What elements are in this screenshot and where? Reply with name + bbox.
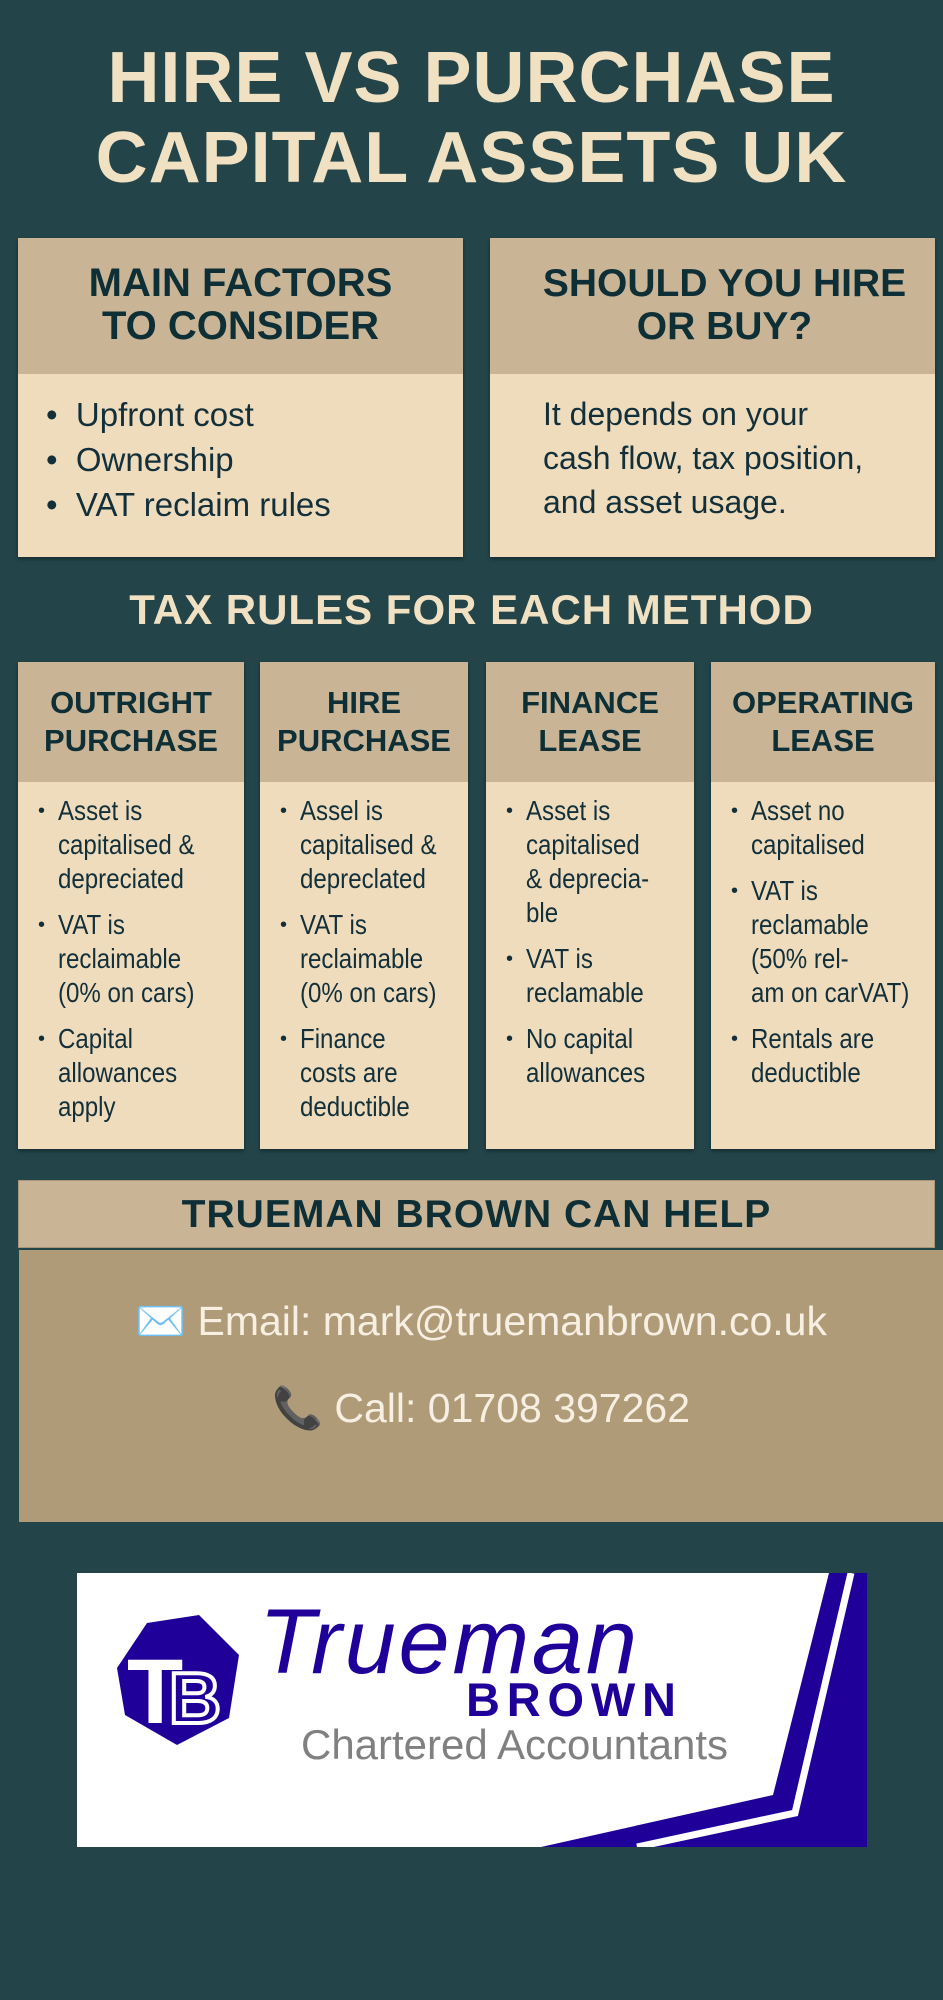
list: reclamable — [526, 977, 644, 1008]
list: factors: • Upfront cost — [46, 396, 254, 433]
list: allowances — [526, 1057, 645, 1088]
title: HIRE VS PURCHASE — [107, 38, 836, 118]
list: Capital — [58, 1023, 133, 1054]
heading: LEASE — [771, 723, 875, 758]
heading: PURCHASE — [44, 723, 218, 758]
title: CAPITAL ASSETS UK — [96, 118, 847, 198]
heading — [260, 662, 468, 782]
list: VAT is — [526, 943, 593, 974]
heading: LEASE — [538, 723, 642, 758]
list: reclaimable — [58, 943, 181, 974]
list: Asset is — [526, 795, 610, 826]
panel: hire or buy — [490, 238, 935, 557]
list: capitalised & — [300, 829, 437, 860]
heading: HIRE — [327, 685, 401, 720]
list: factors: • Ownership — [46, 441, 234, 478]
text: answer: cash flow, tax position, — [543, 440, 863, 476]
list — [38, 795, 195, 1122]
heading: main factors — [18, 238, 463, 374]
list: allowances — [58, 1057, 177, 1088]
list: VAT is — [58, 909, 125, 940]
list: VAT is — [751, 875, 818, 906]
list: & deprecia- — [526, 863, 649, 894]
heading: tax rules: TAX RULES FOR EACH METHOD — [129, 586, 814, 633]
logo text: BROWN — [466, 1673, 676, 1726]
heading: hire or buy: OR BUY? — [637, 305, 812, 348]
logo text: Chartered Accountants — [301, 1721, 728, 1768]
logo: trueman brown — [77, 1573, 867, 1847]
list: (50% rel- — [751, 943, 849, 974]
list: Rentals are — [751, 1023, 874, 1054]
heading — [18, 662, 244, 782]
heading: OPERATING — [732, 685, 914, 720]
heading — [711, 662, 935, 782]
panel: contact — [19, 1250, 943, 1522]
contact: phone: 📞 Call: 01708 397262 — [272, 1385, 690, 1431]
list: apply — [58, 1091, 116, 1122]
icon: TB hexagon — [117, 1615, 239, 1745]
list: (0% on cars) — [300, 977, 436, 1008]
list: Asset no — [751, 795, 845, 826]
icon: TB hexagon: B — [169, 1659, 221, 1739]
list: VAT is — [300, 909, 367, 940]
panel: main factors — [18, 238, 463, 557]
heading: main factors: TO CONSIDER — [102, 304, 379, 348]
list: capitalised & — [58, 829, 195, 860]
list: Finance — [300, 1023, 386, 1054]
heading: hire or buy: SHOULD YOU HIRE — [543, 262, 906, 305]
list: capitalised — [751, 829, 865, 860]
list — [506, 795, 649, 1088]
logo text: Trueman — [259, 1591, 637, 1693]
list: deductible — [751, 1057, 861, 1088]
list: am on carVAT) — [751, 977, 909, 1008]
heading: PURCHASE — [277, 723, 451, 758]
list — [280, 795, 437, 1122]
panel: operating lease — [711, 662, 935, 1149]
list: No capital — [526, 1023, 633, 1054]
heading: hire or buy — [490, 238, 935, 374]
panel: finance lease — [486, 662, 694, 1149]
list: Asset is — [58, 795, 142, 826]
list: Assel is — [300, 795, 383, 826]
panel: hire purchase — [260, 662, 468, 1149]
heading: main factors: MAIN FACTORS — [89, 261, 392, 305]
heading: trueman brown can help — [18, 1180, 935, 1248]
list: costs are — [300, 1057, 398, 1088]
list: reclamable — [751, 909, 869, 940]
heading: FINANCE — [521, 685, 659, 720]
heading: trueman brown can help: TRUEMAN BROWN CAN HELP — [182, 1193, 771, 1236]
logo text — [259, 1591, 728, 1768]
list: factors — [46, 396, 331, 523]
list: ble — [526, 897, 558, 928]
list: factors: • VAT reclaim rules — [46, 486, 331, 523]
list: depreclated — [300, 863, 426, 894]
heading: OUTRIGHT — [50, 685, 212, 720]
list: depreciated — [58, 863, 184, 894]
list: deductible — [300, 1091, 410, 1122]
list — [732, 795, 909, 1088]
icon: TB hexagon: T — [127, 1641, 183, 1743]
contact: email: ✉️ Email: mark@truemanbrown.co.uk — [135, 1298, 827, 1344]
list: reclaimable — [300, 943, 423, 974]
list: capitalised — [526, 829, 640, 860]
panel: outright purchase — [18, 662, 244, 1149]
heading — [486, 662, 694, 782]
text: answer — [543, 396, 863, 520]
title — [96, 38, 847, 198]
text: answer: It depends on your — [543, 396, 808, 432]
text: answer: and asset usage. — [543, 484, 787, 520]
list: (0% on cars) — [58, 977, 194, 1008]
